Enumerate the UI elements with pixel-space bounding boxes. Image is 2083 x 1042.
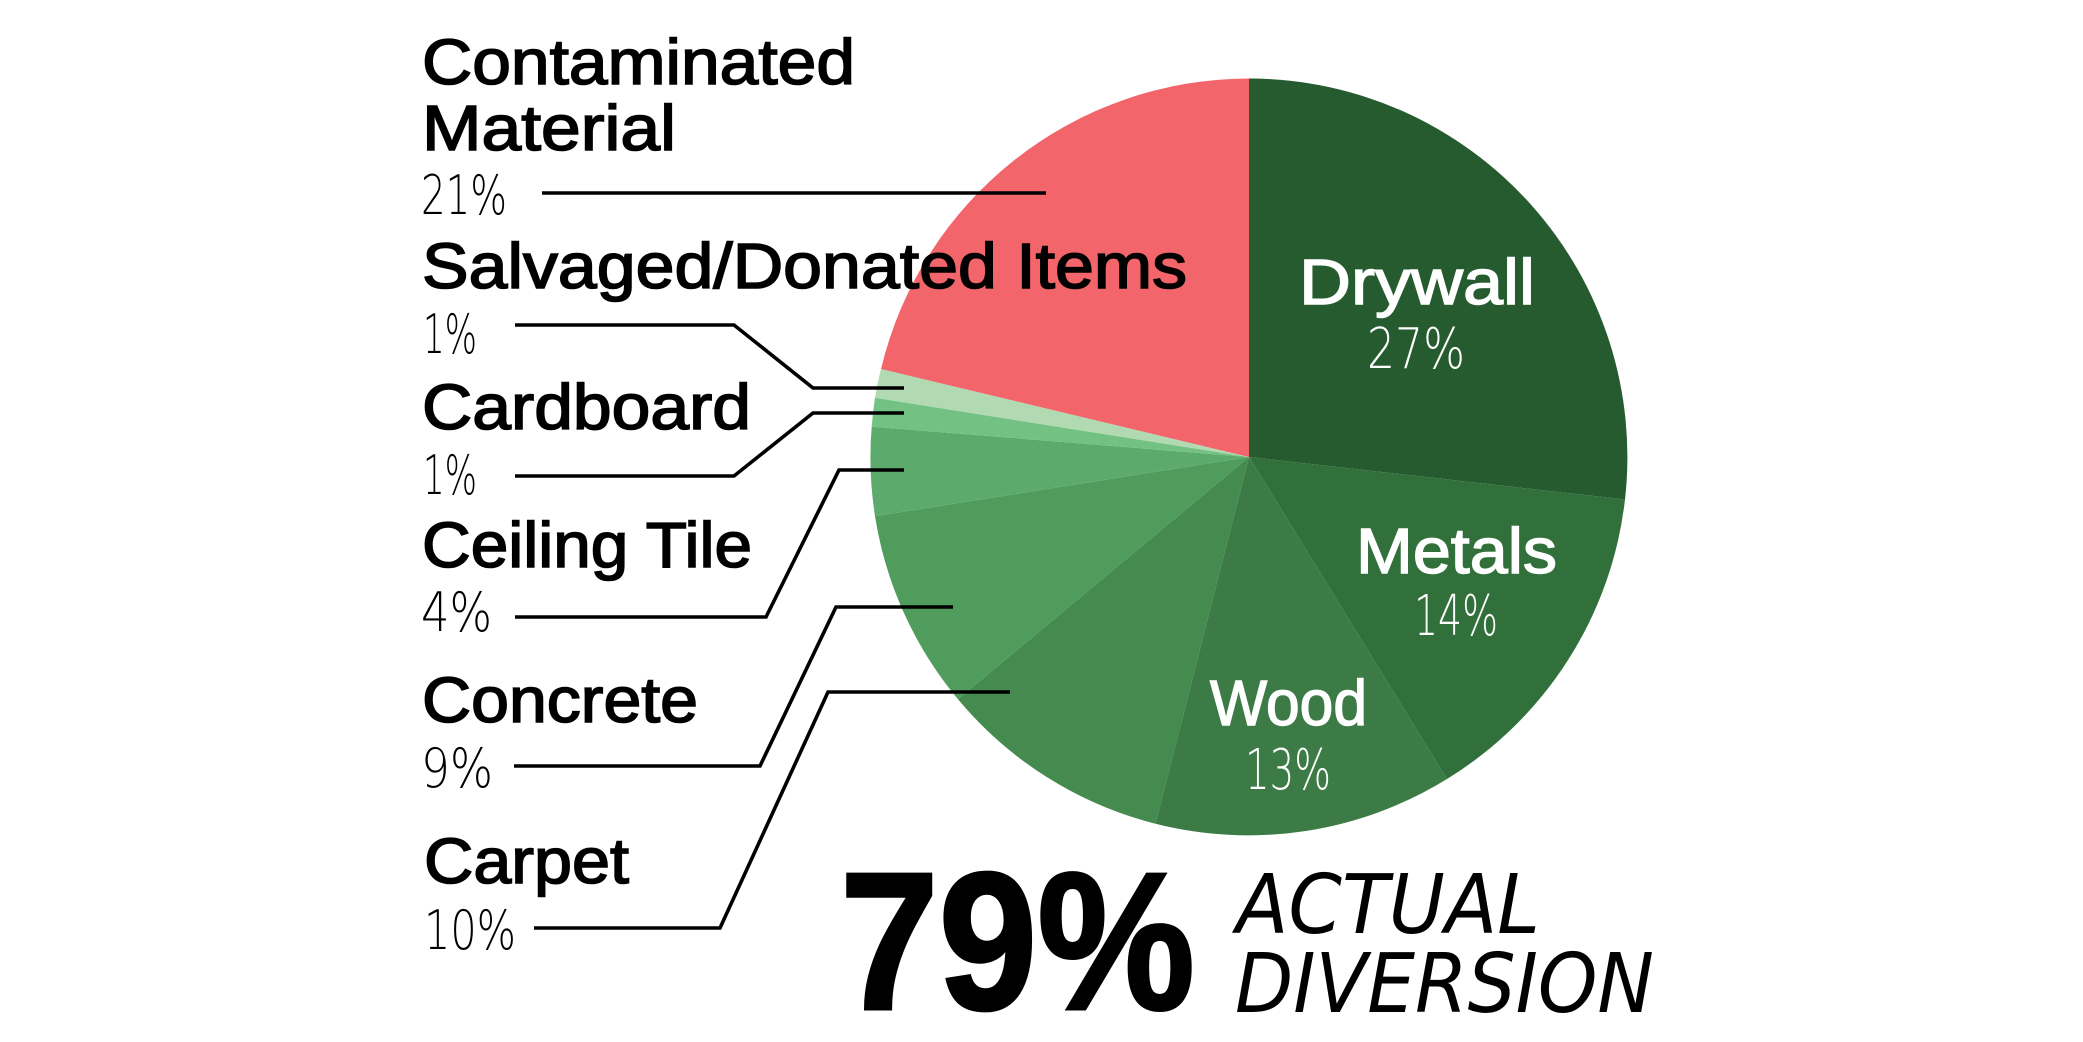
label: concrete 9% [421, 664, 698, 800]
label: ceiling tile 4% [421, 509, 752, 644]
label: contaminated material 21%: Contaminated [422, 26, 855, 98]
label: cardboard 1% [422, 371, 751, 507]
slice: carpet [958, 457, 1249, 824]
pie chart [870, 78, 1627, 835]
leader: concrete [514, 607, 953, 766]
label: contaminated material 21%: 21% [421, 164, 507, 227]
label: cardboard 1%: Cardboard [422, 371, 751, 443]
leader: ceiling tile [515, 470, 904, 617]
leader: cardboard [515, 413, 904, 476]
label: carpet 10%: 10% [424, 899, 516, 962]
leader: contaminated material [542, 191, 1046, 195]
slice: drywall [1249, 78, 1627, 500]
slice: concrete [875, 457, 1249, 699]
slice: contaminated material [881, 78, 1249, 457]
label: ceiling tile 4%: Ceiling Tile [422, 509, 752, 581]
label: wood 13% [1210, 667, 1367, 803]
label: metals 14%: 14% [1414, 584, 1498, 649]
headline caption: actual diversion: DIVERSION [1235, 937, 1654, 1032]
label: carpet 10%: Carpet [424, 825, 629, 897]
label: wood 13%: Wood [1210, 667, 1367, 739]
label: carpet 10% [424, 825, 629, 962]
slice: cardboard [872, 398, 1249, 457]
headline caption: actual diversion [1231, 858, 1654, 1032]
label: metals 14% [1356, 515, 1557, 649]
label: contaminated material 21%: Material [422, 92, 676, 164]
leader: carpet [534, 692, 1010, 928]
slice: salvaged/donated items [875, 369, 1249, 457]
label: wood 13%: 13% [1245, 738, 1331, 803]
label: ceiling tile 4%: 4% [421, 581, 492, 644]
label: contaminated material 21% [421, 26, 855, 227]
slice: metals [1249, 457, 1625, 779]
label: drywall 27%: Drywall [1299, 246, 1535, 318]
headline caption: actual diversion: ACTUAL [1231, 858, 1540, 953]
label: metals 14%: Metals [1356, 515, 1557, 587]
label: salvaged/donated items 1% [422, 230, 1187, 366]
label: salvaged/donated items 1%: 1% [423, 303, 477, 366]
label: cardboard 1%: 1% [423, 444, 477, 507]
slice: wood [1156, 457, 1447, 835]
leader: salvaged/donated items [515, 325, 904, 388]
label: drywall 27% [1299, 246, 1535, 382]
label: concrete 9%: Concrete [422, 664, 698, 736]
slice: ceiling tile [870, 427, 1249, 516]
label: drywall 27%: 27% [1367, 317, 1465, 382]
label: concrete 9%: 9% [421, 737, 493, 800]
label: salvaged/donated items 1%: Salvaged/Donated Items [422, 230, 1187, 302]
